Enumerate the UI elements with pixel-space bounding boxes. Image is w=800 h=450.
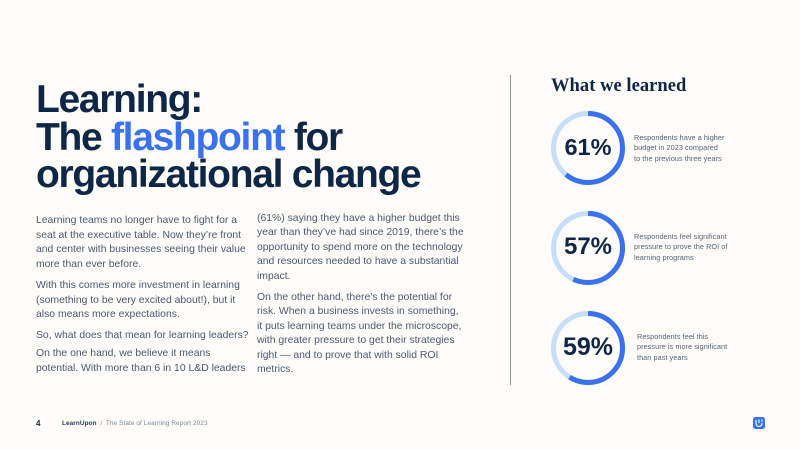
vertical divider — [510, 75, 511, 385]
text block: left column: also means more expectations. — [36, 309, 180, 320]
description: 59%: Respondents feel this — [637, 332, 708, 341]
text block: left column: seat at the executive table. Now they’re front — [36, 230, 241, 241]
text block: right column: (61%) saying they have a higher budget this — [257, 212, 460, 224]
stat: 59% — [551, 311, 728, 385]
value: 59%: 59% — [563, 333, 613, 361]
text block: right column: right — and to prove that with solid ROI — [257, 350, 438, 361]
text block: left column: Learning teams no longer have to fight for a — [36, 215, 237, 226]
description: 61%: budget in 2023 compared — [634, 143, 718, 152]
text block: right column: year than they’ve had since 2019, there’s the — [257, 227, 464, 238]
ring: 61% — [551, 111, 625, 185]
text block: left column: So, what does that mean for learning leaders? — [36, 330, 249, 341]
description: 57%: pressure to prove the ROI of — [634, 242, 727, 251]
title: Learning: — [36, 78, 202, 121]
description: 57%: learning programs — [634, 253, 694, 262]
ring: 59% — [551, 311, 625, 385]
description: 61%: Respondents have a higher — [634, 133, 724, 142]
text block: right column: with greater pressure to get their strategies — [257, 335, 455, 346]
stat: 57% — [551, 211, 728, 285]
page number: 4 — [36, 419, 40, 428]
title — [36, 78, 420, 196]
text block: left column: (something to be very excited about!), but it — [36, 295, 235, 306]
text block: left column: potential. With more than 6 in 10 L&D leaders — [36, 363, 246, 374]
value: 61%: 61% — [564, 134, 612, 160]
value: 57%: 57% — [564, 233, 612, 260]
icon: LearnUpon logo — [753, 417, 765, 429]
stat: 61% — [551, 111, 724, 185]
text block: left column: On the one hand, we believe it means — [36, 348, 210, 359]
text block: left column: and center with businesses seeing their value — [36, 244, 246, 255]
text block: left column — [36, 215, 249, 374]
heading: what we learned: What we learned — [551, 76, 686, 96]
title: organizational change — [36, 153, 420, 196]
text block: right column: it puts learning teams under the microscope, — [257, 321, 461, 332]
text block: right column — [257, 212, 464, 375]
text block: right column: opportunity to spend more on the technology — [257, 242, 463, 253]
text block: right column: impact. — [257, 271, 290, 282]
report name: LearnUpon / The State of Learning Report 2023 — [62, 420, 208, 427]
description: 57%: Respondents feel significant — [634, 232, 727, 241]
description: 57% — [634, 232, 728, 262]
text block: right column: risk. When a business invests in something, — [257, 306, 459, 317]
description: 59% — [637, 332, 728, 362]
text block: right column: On the other hand, there’s the potential for — [257, 292, 452, 302]
description: 61% — [634, 133, 724, 163]
text block: right column: and resources needed to have a substantial — [257, 256, 459, 267]
footer — [36, 419, 208, 428]
title: The flashpoint for — [36, 116, 342, 158]
text block: right column: metrics. — [257, 364, 293, 375]
text block: left column: more than ever before. — [36, 259, 141, 270]
description: 59%: pressure is more significant — [637, 342, 727, 351]
description: 61%: to the previous three years — [634, 154, 722, 163]
ring: 57% — [551, 211, 625, 285]
text block: left column: With this comes more investment in learning — [36, 280, 240, 291]
description: 59%: than past years — [637, 353, 688, 362]
